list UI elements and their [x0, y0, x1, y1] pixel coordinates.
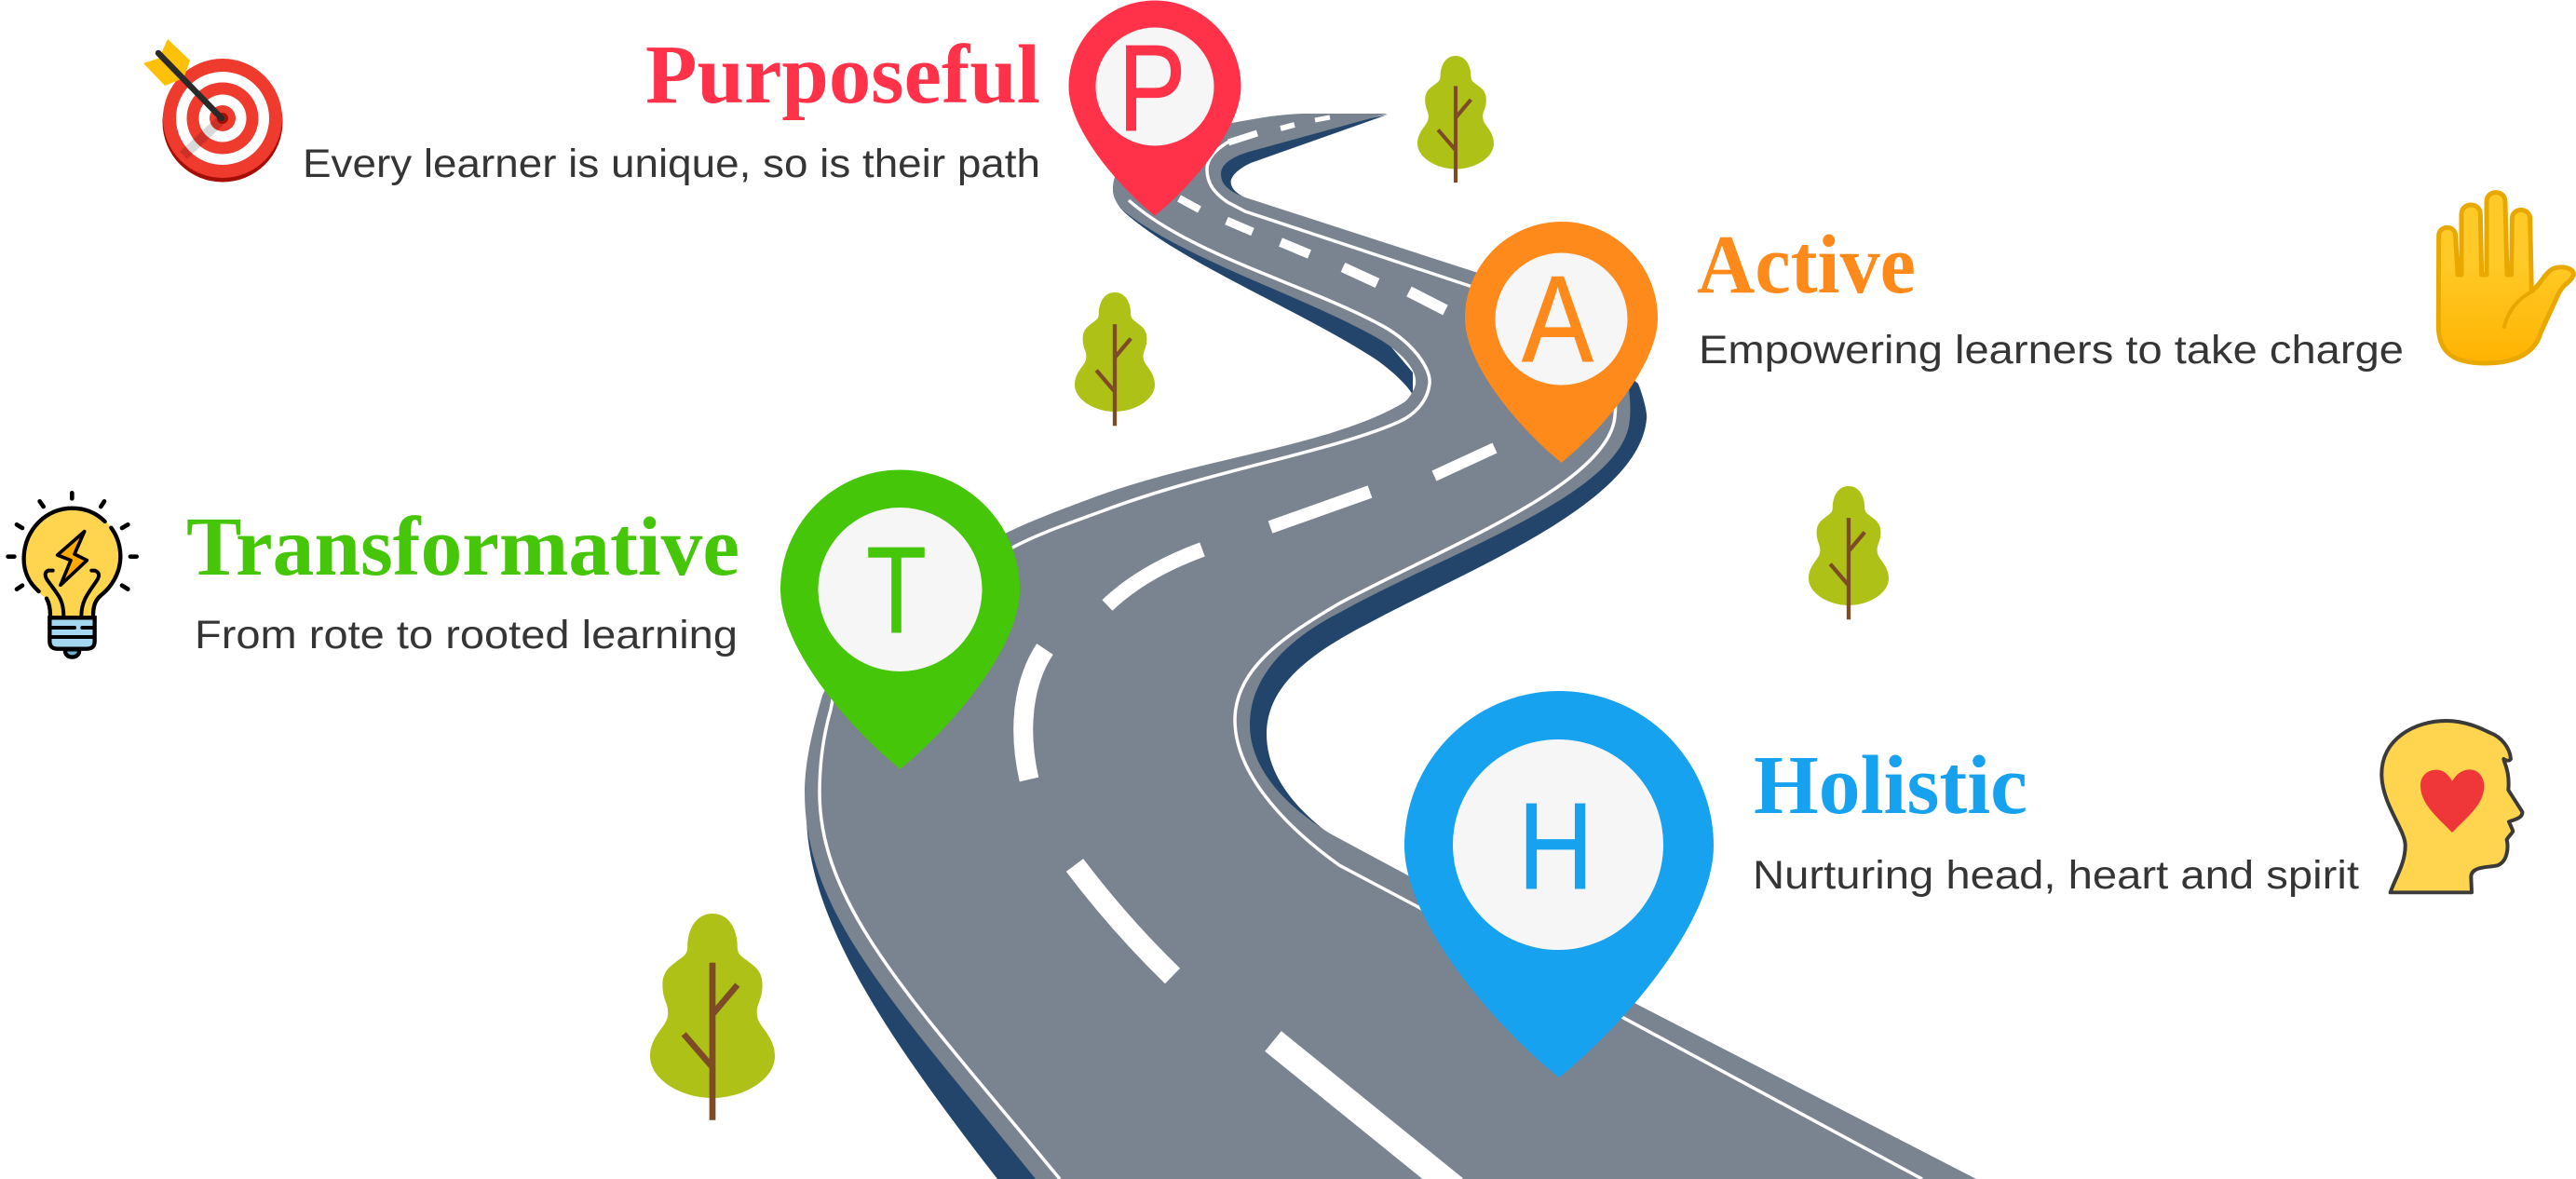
pin: P	[1069, 0, 1241, 216]
tree: right	[1809, 486, 1889, 619]
tree: centre left	[1075, 292, 1155, 426]
icon: raised hand	[2438, 193, 2573, 363]
road centre dashes	[1024, 117, 1495, 1179]
pin: T: T	[866, 522, 927, 659]
pin: H: H	[1518, 777, 1593, 915]
text: Purposeful description: Every learner is unique, so is their path	[303, 142, 1040, 186]
text: Holistic description: Nurturing head, heart and spirit	[1753, 853, 2359, 898]
pin: P: P	[1118, 19, 1186, 156]
text: Active description: Empowering learners to take charge	[1699, 328, 2404, 373]
pin: T	[780, 469, 1020, 769]
pin: H	[1404, 691, 1714, 1077]
tree: top right	[1417, 56, 1494, 183]
icon: head with heart	[2381, 721, 2522, 892]
heading: Purposeful: Purposeful	[645, 29, 1040, 121]
icon: light bulb	[8, 493, 137, 657]
heading: Holistic: Holistic	[1754, 739, 2027, 832]
road surface	[805, 114, 1976, 1179]
heading: Active: Active	[1697, 219, 1916, 311]
pin: A: A	[1522, 251, 1593, 388]
icon: target with arrow	[143, 39, 283, 183]
tree: large bottom left	[650, 914, 775, 1120]
road shoulder shadow	[807, 115, 1647, 1179]
text: Transformative description: From rote to rooted learning	[195, 613, 738, 657]
heading: Transformative: Transformative	[186, 501, 739, 593]
winding road	[805, 114, 1976, 1179]
pin: A	[1465, 222, 1658, 463]
road edge lines	[820, 140, 1922, 1179]
